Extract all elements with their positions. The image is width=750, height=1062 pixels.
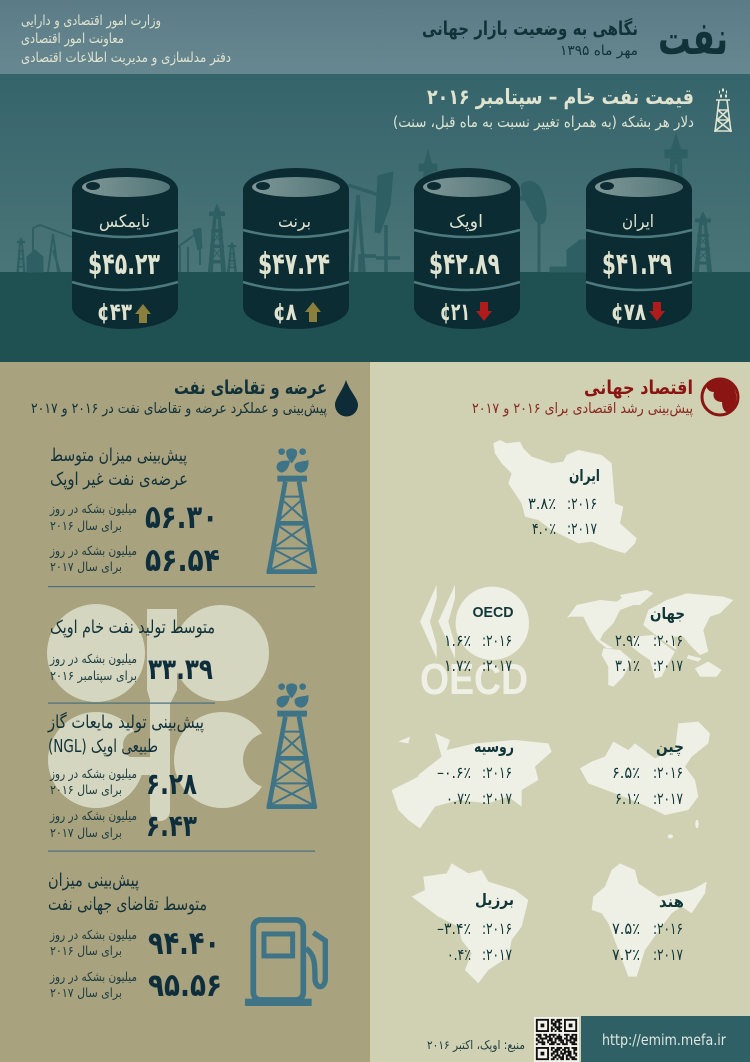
header band <box>0 0 750 74</box>
barrel: Brent: برنت <box>278 212 311 232</box>
footer URL band <box>581 1016 750 1062</box>
subheading: دلار هر بشکه (به همراه تغییر نسبت به ماه قبل، سنت) <box>393 113 694 131</box>
icon: rig small <box>714 90 732 132</box>
barrel: OPEC: $۴۲.۸۹ <box>429 247 500 282</box>
ministry text block <box>21 13 231 66</box>
card: India: ۷.۵٪ <box>612 919 640 938</box>
heading: عرضه و تقاضای نفت <box>174 377 327 399</box>
card: China: :۲۰۱۷ <box>653 789 683 808</box>
QR code <box>534 1017 579 1062</box>
card: World: :۲۰۱۶ <box>653 631 683 650</box>
footer URL band: http://emim.mefa.ir <box>602 1031 727 1049</box>
block: non-OPEC supply <box>49 445 220 579</box>
card: OECD: :۲۰۱۷ <box>482 656 512 675</box>
block: OPEC NGL: میلیون بشکه در روز <box>49 808 137 824</box>
panel: crude price band <box>0 74 750 360</box>
card: India: :۲۰۱۷ <box>653 945 683 964</box>
ministry text block: وزارت امور اقتصادی و دارایی <box>21 13 161 29</box>
icon: oil rig <box>267 448 317 573</box>
card: Iran: ۳.۸٪ <box>528 494 556 513</box>
block: OPEC NGL <box>47 711 204 844</box>
block: OPEC crude production: برای سپتامبر ۲۰۱۶ <box>50 668 137 684</box>
block: OPEC NGL: طبیعی اوپک (NGL) <box>48 736 158 757</box>
block: OPEC crude production: ۳۳.۳۹ <box>148 652 213 686</box>
card: Iran <box>493 440 637 553</box>
card: Russia <box>392 733 552 828</box>
barrel: NYMEX <box>72 168 178 329</box>
block: world demand: میلیون بشکه در روز <box>49 969 137 985</box>
block: non-OPEC supply: میلیون بشکه در روز <box>49 543 137 559</box>
card: China: چین <box>656 737 684 757</box>
block: OPEC NGL: ۶.۲۸ <box>146 767 197 802</box>
panel: world economy <box>370 360 750 1062</box>
logo: OPEC watermark <box>47 604 299 821</box>
heading: global market overview: نگاهی به وضعیت بازار جهانی <box>422 17 638 40</box>
icon: oil drop <box>335 380 358 416</box>
card: India: :۲۰۱۶ <box>653 919 683 938</box>
icon: globe <box>702 379 738 415</box>
card: OECD: :۲۰۱۶ <box>482 631 512 650</box>
card: Brazil: ۰.۴٪ <box>447 945 471 964</box>
ministry text block: معاونت امور اقتصادی <box>21 31 124 47</box>
barrel: Brent: $۴۷.۲۴ <box>258 247 330 282</box>
card: OECD: ۱.۶٪ <box>444 631 471 650</box>
card: OECD <box>420 585 529 704</box>
card: China <box>580 722 710 838</box>
barrel: Iran: $۴۱.۳۹ <box>602 247 672 282</box>
card: World: :۲۰۱۷ <box>653 656 683 675</box>
card: Brazil: –۳.۴٪ <box>437 919 471 938</box>
card: OECD: ۱.۷٪ <box>444 656 471 675</box>
date: مهر ماه ۱۳۹۵ <box>560 43 638 59</box>
card: Brazil: برزیل <box>475 890 514 909</box>
card: OECD: OECD <box>472 604 514 621</box>
barrel: NYMEX: نایمکس <box>99 212 150 232</box>
subheading: پیش‌بینی و عملکرد عرضه و تقاضای نفت در ۲۰۱۶ و ۲۰۱۷ <box>31 401 327 417</box>
icon: oil rig 2 <box>267 683 317 808</box>
barrel: Iran <box>586 168 692 329</box>
card: Iran: ۴.۰٪ <box>532 519 556 538</box>
card: Brazil: :۲۰۱۷ <box>482 945 512 964</box>
icon: fuel pump <box>245 920 325 1006</box>
block: world demand: ۹۵.۵۶ <box>148 966 222 1004</box>
block: non-OPEC supply: برای سال ۲۰۱۷ <box>50 559 122 575</box>
background rigs and pumpjacks silhouette <box>17 134 712 272</box>
card: World: ۳.۱٪ <box>615 656 640 675</box>
block: non-OPEC supply: عرضه‌ی نفت غیر اوپک <box>50 469 188 490</box>
card: World <box>567 590 733 687</box>
card: OECD: OECD <box>420 655 528 704</box>
card: Russia: –۰.۶٪ <box>437 763 471 782</box>
block: OPEC NGL: برای سال ۲۰۱۷ <box>50 825 122 841</box>
block: OPEC NGL: میلیون بشکه در روز <box>49 766 137 782</box>
block: OPEC NGL: برای سال ۲۰۱۶ <box>50 782 122 798</box>
block: non-OPEC supply: میلیون بشکه در روز <box>49 501 137 517</box>
card: Russia: :۲۰۱۶ <box>482 763 512 782</box>
barrel: NYMEX: ¢۴۳ <box>97 298 132 326</box>
block: OPEC crude production: متوسط تولید نفت خام اوپک <box>50 617 215 638</box>
block: non-OPEC supply: پیش‌بینی میزان متوسط <box>50 445 187 466</box>
block: world demand: ۹۴.۴۰ <box>148 924 220 962</box>
source note: منبع: اوپک، اکتبر ۲۰۱۶ <box>427 1038 525 1053</box>
block: non-OPEC supply: ۵۶.۵۴ <box>145 541 220 579</box>
card: China: ۶.۱٪ <box>615 789 640 808</box>
heading: اقتصاد جهانی <box>584 377 693 399</box>
card: India: هند <box>659 892 684 911</box>
card: Iran: ایران <box>569 466 600 485</box>
block: OPEC NGL: ۶.۴۳ <box>146 809 197 844</box>
heading: crude oil price: قیمت نفت خام – سپتامبر ۲۰۱۶ <box>427 85 694 109</box>
barrel: Brent <box>243 168 349 329</box>
subheading: پیش‌بینی رشد اقتصادی برای ۲۰۱۶ و ۲۰۱۷ <box>472 401 693 417</box>
block: world demand: برای سال ۲۰۱۷ <box>50 985 122 1001</box>
block: world demand: متوسط تقاضای جهانی نفت <box>48 894 207 915</box>
block: OPEC crude production <box>49 617 215 686</box>
block: world demand: میلیون بشکه در روز <box>49 927 137 943</box>
card: China: :۲۰۱۶ <box>653 763 683 782</box>
barrel: Brent: ¢۸ <box>273 298 297 326</box>
card: World: ۲.۹٪ <box>615 631 640 650</box>
block: OPEC NGL: پیش‌بینی تولید مایعات گاز <box>47 711 204 733</box>
block: world demand: برای سال ۲۰۱۶ <box>50 943 122 959</box>
card: India <box>592 863 707 977</box>
card: Iran: :۲۰۱۷ <box>567 519 597 538</box>
barrel: Iran: ایران <box>622 212 654 232</box>
block: OPEC crude production: میلیون بشکه در روز <box>49 651 137 667</box>
card: Iran: :۲۰۱۶ <box>567 494 597 513</box>
barrel: OPEC: اوپک <box>449 212 483 232</box>
card: China: ۶.۵٪ <box>612 763 640 782</box>
card: Russia: روسیه <box>474 737 514 756</box>
card: Russia: ۰.۷٪ <box>446 789 471 808</box>
barrel: NYMEX: $۴۵.۲۳ <box>88 247 160 282</box>
barrel: OPEC: ¢۲۱ <box>440 298 470 326</box>
card: Russia: :۲۰۱۷ <box>482 789 512 808</box>
block: non-OPEC supply: برای سال ۲۰۱۶ <box>50 518 122 534</box>
card: Brazil <box>412 863 528 983</box>
panel: supply and demand <box>0 360 370 1062</box>
block: world demand <box>48 870 222 1004</box>
barrel: Iran: ¢۷۸ <box>611 298 646 326</box>
block: non-OPEC supply: ۵۶.۳۰ <box>145 498 218 536</box>
barrel: OPEC <box>414 168 520 329</box>
card: World: جهان <box>650 604 685 623</box>
card: Brazil: :۲۰۱۶ <box>482 919 512 938</box>
block: world demand: پیش‌بینی میزان <box>48 870 139 891</box>
card: India: ۷.۲٪ <box>612 945 640 964</box>
ministry text block: دفتر مدلسازی و مدیریت اطلاعات اقتصادی <box>21 50 231 66</box>
